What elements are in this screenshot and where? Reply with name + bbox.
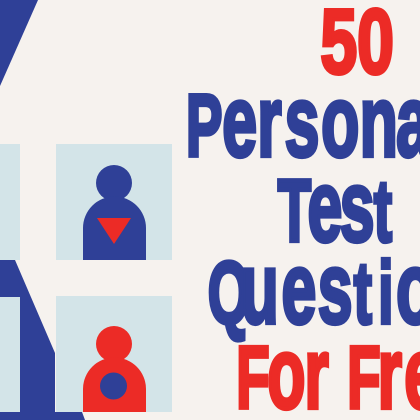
icon: red person with blue circle [83,326,146,412]
top-left blue triangle [0,0,38,86]
title: Q [208,244,250,342]
title: ues [241,232,353,345]
title: ti [354,244,393,342]
panel: lower left tile [0,297,20,412]
blue house-shaped frame [0,260,85,420]
title: P [186,77,222,175]
title: t [374,162,392,260]
panel: blue person tile [56,144,172,260]
panel: red person tile [56,296,172,412]
icon: blue person with red triangle [83,165,146,260]
title: es [308,150,375,263]
title [186,0,420,420]
panel: left cropped tile [0,144,20,260]
title: T [278,162,311,260]
